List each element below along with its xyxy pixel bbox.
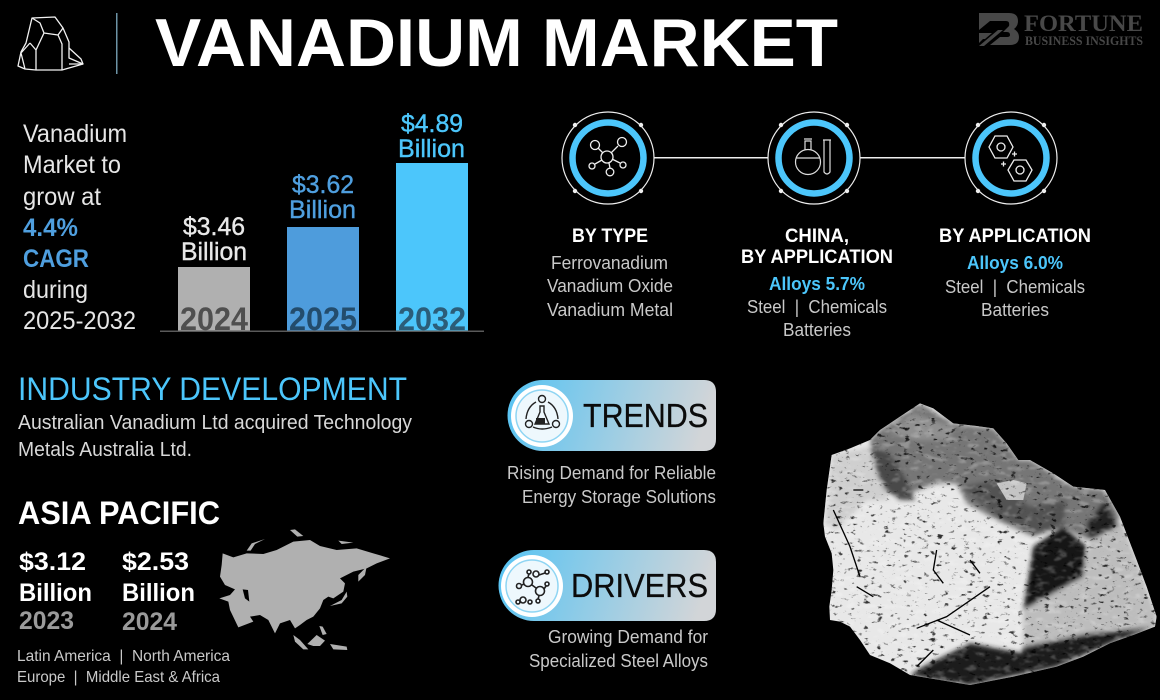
text block: drivers description [529,627,708,671]
panel: china by application: CHINA, [785,226,849,247]
panel: china by application [741,226,893,340]
text block: other regions [17,648,230,686]
bar: 2024: 2024 [180,301,248,337]
icon: vanadium rock outline [18,17,83,70]
text block: other regions: Europe | Middle East & Africa [17,669,220,686]
bar: 2024 [178,213,250,337]
divider: header rule [116,13,118,74]
panel: by application: Batteries [981,300,1049,320]
image: vanadium ore rock [820,400,1160,690]
panel: china by application: Steel | Chemicals [747,297,887,317]
panel: china by application: Alloys 5.7% [769,274,865,294]
panel: by type: Vanadium Metal [547,300,673,320]
panel: by application: BY APPLICATION [939,226,1091,247]
bar: 2025 [287,171,359,337]
stat: 2023 value: Billion [19,579,92,607]
stat: 2024 value: $2.53 [122,548,189,576]
text block: other regions: Latin America | North America [17,648,230,665]
title: VANADIUM MARKET [155,5,838,81]
icon: by type molecule [562,112,654,204]
bar: 2025: $3.62 [292,171,354,199]
text block: CAGR statement: 2025-2032 [23,307,136,335]
panel: by application: Alloys 6.0% [967,253,1063,273]
text block: CAGR statement [23,120,136,335]
panel: china by application: BY APPLICATION [741,247,893,268]
logo: Fortune Business Insights: FORTUNE [1024,11,1143,36]
badge: trends [508,380,716,451]
badge: drivers [498,550,716,621]
icon: by application hexagons [965,112,1057,204]
text block: drivers description: Specialized Steel Alloys [529,651,708,671]
bar: 2024: $3.46 [183,213,245,241]
text block: CAGR statement: 4.4% [23,214,78,242]
connector line between segment icons [654,157,965,158]
bar: 2025: 2025 [289,301,357,337]
icon: drivers molecules [501,555,563,617]
text block: CAGR statement: grow at [23,183,101,211]
icon: trends flask network [511,385,573,447]
panel: asia pacific: ASIA PACIFIC [18,495,220,531]
panel: asia pacific [17,495,230,686]
panel: by application [939,226,1091,320]
badge: trends: TRENDS [583,397,708,434]
logo: Fortune Business Insights: BUSINESS INSIGHTS [1025,34,1143,48]
stat: 2023 value: $3.12 [19,548,86,576]
stat: 2024 value: Billion [122,579,195,607]
bar: 2024: Billion [181,238,247,266]
text block: CAGR statement: during [23,276,88,304]
bar: 2032: Billion [398,135,465,163]
stat: 2024 value: 2024 [122,608,177,636]
bar: 2025: Billion [289,196,356,224]
panel: by type [547,226,673,320]
text block: trends description [507,463,716,507]
panel: by application: Steel | Chemicals [945,277,1085,297]
text block: trends description: Energy Storage Solutions [522,487,716,507]
bar: 2032: 2032 [398,301,466,337]
badge: drivers: DRIVERS [571,567,708,604]
text block: trends description: Rising Demand for Reliable [507,463,716,483]
map: Asia Pacific [219,529,390,650]
text block: CAGR statement: CAGR [23,245,89,273]
panel: industry development: Metals Australia Ltd. [18,439,192,461]
panel: by type: Vanadium Oxide [547,276,673,296]
logo: Fortune Business Insights [979,11,1143,48]
panel: industry development: Australian Vanadium Ltd acquired Technology [18,412,412,434]
bar: 2032 [396,110,468,337]
bar chart: market size [160,110,484,337]
text block: CAGR statement: Market to [23,151,121,179]
text block: CAGR statement: Vanadium [23,120,127,148]
stat: 2023 value [19,548,92,635]
panel: industry development: INDUSTRY DEVELOPMENT [18,371,407,407]
panel: china by application: Batteries [783,320,851,340]
icon: china flask and test tube [768,112,860,204]
bar: 2032: $4.89 [401,110,463,138]
stat: 2024 value [122,548,195,636]
text block: drivers description: Growing Demand for [548,627,708,647]
panel: industry development [18,371,412,461]
stat: 2023 value: 2023 [19,607,74,635]
panel: by type: BY TYPE [572,226,648,247]
panel: by type: Ferrovanadium [551,253,668,273]
